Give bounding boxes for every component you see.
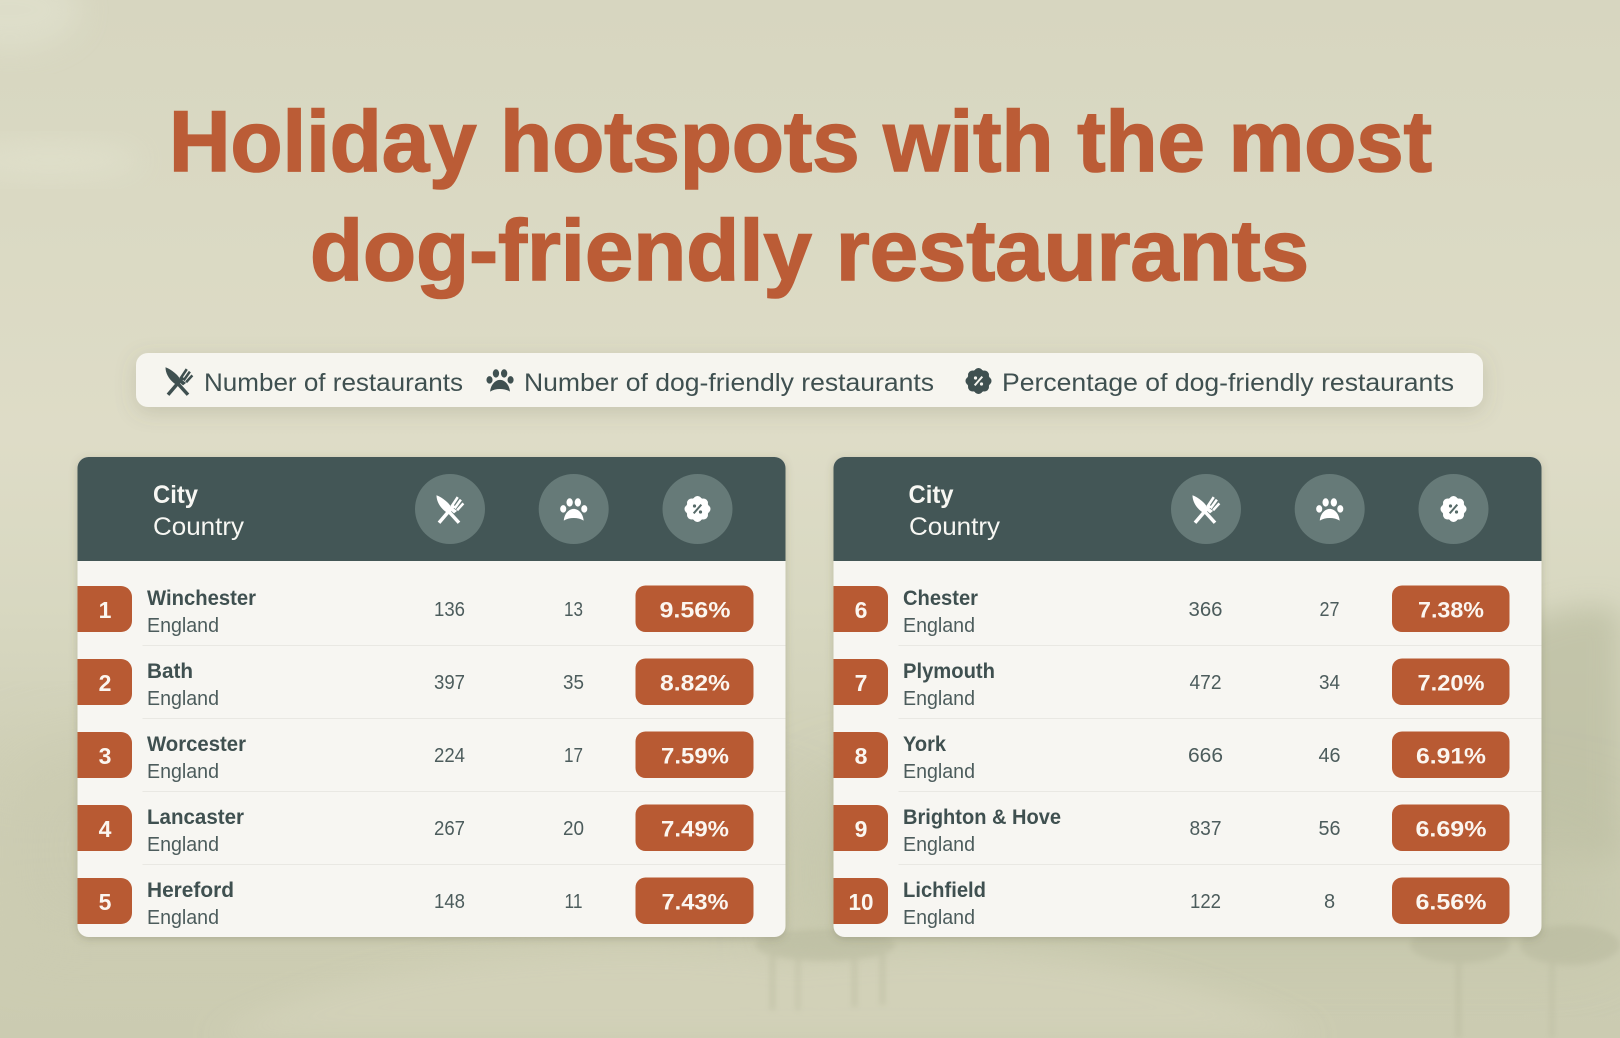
row: 4 Lancaster: 267 bbox=[434, 818, 465, 840]
row: 10 Lichfield: 8 bbox=[1324, 891, 1335, 913]
row: 2 Bath: England bbox=[147, 688, 219, 710]
row: 4 Lancaster: Lancaster bbox=[147, 805, 245, 829]
row: 5 Hereford: 148 bbox=[434, 891, 465, 913]
row: 7 Plymouth: 7.20% bbox=[1418, 670, 1484, 696]
row: 3 Worcester: Worcester bbox=[147, 732, 247, 756]
table header: Country bbox=[153, 513, 245, 541]
row: 9 Brighton & Hove: England bbox=[903, 834, 975, 856]
row: 9 Brighton & Hove: 6.69% bbox=[1416, 816, 1486, 842]
row: 4 Lancaster bbox=[78, 804, 754, 856]
header icon: knife and fork bbox=[1171, 474, 1241, 544]
row: 6 Chester bbox=[834, 586, 1510, 637]
title bbox=[169, 94, 1432, 299]
row: 3 Worcester: 7.59% bbox=[661, 744, 729, 768]
row: 1 Winchester: 9.56% bbox=[660, 598, 730, 622]
row: 7 Plymouth bbox=[834, 658, 1510, 710]
row: 6 Chester: Chester bbox=[903, 586, 979, 610]
row: 8 York: 666 bbox=[1188, 745, 1223, 767]
header icon: knife and fork bbox=[415, 474, 485, 544]
row: 3 Worcester: 17 bbox=[564, 745, 583, 767]
row: 2 Bath: 2 bbox=[99, 670, 111, 696]
row: 5 Hereford: 11 bbox=[564, 891, 582, 913]
row: 2 Bath bbox=[78, 658, 754, 710]
row: 9 Brighton & Hove: 837 bbox=[1190, 818, 1222, 840]
legend icon: percentage badge bbox=[966, 368, 992, 394]
row: 8 York: 6.91% bbox=[1416, 744, 1486, 768]
row: 9 Brighton & Hove: 56 bbox=[1318, 818, 1340, 840]
row: 1 Winchester: 1 bbox=[99, 597, 112, 623]
row: 9 Brighton & Hove: 9 bbox=[855, 816, 867, 842]
row: 8 York: England bbox=[903, 761, 975, 783]
row: 5 Hereford: 5 bbox=[99, 889, 112, 915]
row: 4 Lancaster: 4 bbox=[99, 816, 112, 842]
row: 10 Lichfield bbox=[834, 878, 1510, 929]
row: 2 Bath: 35 bbox=[563, 672, 584, 694]
row: 2 Bath: Bath bbox=[147, 659, 193, 683]
row: 4 Lancaster: England bbox=[147, 834, 219, 856]
row: 9 Brighton & Hove bbox=[834, 804, 1510, 856]
row: 7 Plymouth: 7 bbox=[855, 670, 867, 696]
row: 10 Lichfield: England bbox=[903, 907, 975, 929]
row: 10 Lichfield: Lichfield bbox=[903, 878, 986, 902]
legend icon: paw bbox=[486, 369, 514, 392]
row: 6 Chester: 366 bbox=[1188, 599, 1222, 621]
row: 1 Winchester: 13 bbox=[564, 599, 583, 621]
legend label: percentage of dog-friendly restaurants: Percentage of dog-friendly restaurants bbox=[1002, 369, 1454, 397]
row: 1 Winchester bbox=[78, 586, 754, 637]
legend label: number of restaurants: Number of restaurants bbox=[204, 369, 463, 397]
row: 10 Lichfield: 122 bbox=[1190, 891, 1221, 913]
table header: City bbox=[153, 481, 198, 509]
row: 5 Hereford: Hereford bbox=[147, 878, 234, 902]
legend icon: knife and fork bbox=[166, 367, 192, 395]
row: 8 York: 8 bbox=[855, 743, 868, 769]
row: 1 Winchester: England bbox=[147, 615, 219, 637]
header icon: percentage badge bbox=[662, 474, 732, 544]
row: 1 Winchester: Winchester bbox=[147, 586, 257, 610]
row: 7 Plymouth: England bbox=[903, 688, 975, 710]
row: 2 Bath: 397 bbox=[434, 672, 465, 694]
row: 1 Winchester: 136 bbox=[434, 599, 465, 621]
row: 2 Bath: 8.82% bbox=[660, 670, 730, 696]
header icon: paw bbox=[1295, 474, 1365, 544]
row: 5 Hereford: England bbox=[147, 907, 219, 929]
row: 4 Lancaster: 20 bbox=[563, 818, 584, 840]
row: 6 Chester: 7.38% bbox=[1418, 598, 1484, 622]
row: 3 Worcester: England bbox=[147, 761, 219, 783]
row: 3 Worcester: 224 bbox=[434, 745, 465, 767]
row: 8 York: 46 bbox=[1318, 745, 1340, 767]
row: 7 Plymouth: Plymouth bbox=[903, 659, 995, 683]
legend label: number of dog-friendly restaurants: Number of dog-friendly restaurants bbox=[524, 369, 934, 397]
table header bbox=[78, 457, 786, 561]
table header bbox=[834, 457, 1542, 561]
row: 4 Lancaster: 7.49% bbox=[661, 816, 729, 842]
row: 7 Plymouth: 34 bbox=[1319, 672, 1340, 694]
row: 3 Worcester: 3 bbox=[99, 743, 111, 769]
title: dog-friendly restaurants bbox=[310, 203, 1309, 299]
table header: Country bbox=[909, 513, 1001, 541]
header icon: paw bbox=[539, 474, 609, 544]
row: 8 York: York bbox=[903, 732, 946, 756]
row: 10 Lichfield: 10 bbox=[848, 889, 874, 915]
row: 5 Hereford: 7.43% bbox=[662, 890, 728, 914]
panel: ranks 1 to 5 bbox=[78, 457, 786, 937]
row: 6 Chester: 27 bbox=[1320, 599, 1340, 621]
row: 7 Plymouth: 472 bbox=[1190, 672, 1222, 694]
panel: ranks 6 to 10 bbox=[834, 457, 1542, 937]
row: 5 Hereford bbox=[78, 878, 754, 929]
table header: City bbox=[908, 481, 954, 509]
header icon: percentage badge bbox=[1418, 474, 1488, 544]
row: 6 Chester: 6 bbox=[855, 597, 867, 623]
row: 9 Brighton & Hove: Brighton & Hove bbox=[903, 805, 1061, 829]
row: 10 Lichfield: 6.56% bbox=[1416, 890, 1486, 914]
title: Holiday hotspots with the most bbox=[169, 94, 1432, 190]
row: 3 Worcester bbox=[78, 732, 754, 783]
row: 8 York bbox=[834, 732, 1510, 783]
legend bbox=[136, 353, 1483, 407]
row: 6 Chester: England bbox=[903, 615, 975, 637]
